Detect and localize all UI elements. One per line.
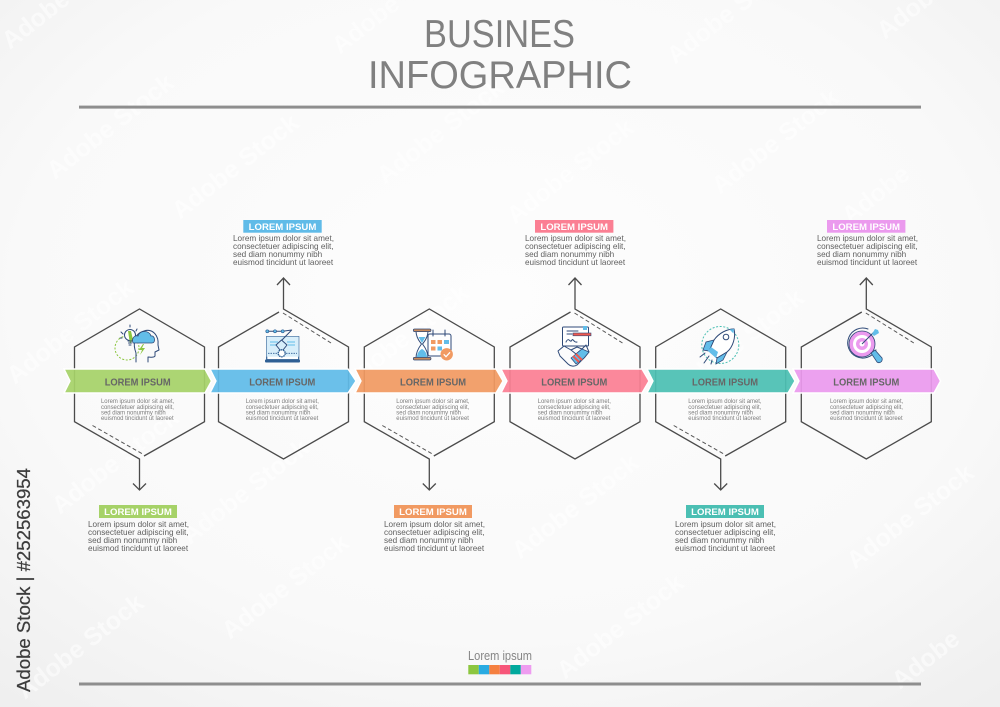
hexagon 1 body text: consectetuer adipiscing elit, xyxy=(101,405,174,411)
hexagon 4 with up arrow xyxy=(510,278,640,459)
hexagon 2 body text: sed diam nonummy nibh xyxy=(246,411,310,417)
hexagon 5 with down arrow xyxy=(656,309,786,490)
callout 5: sed diam nonummy nibh xyxy=(675,536,765,545)
callout 5 xyxy=(675,505,776,553)
hexagon 4 body text: euismod tincidunt ut laoreet xyxy=(538,416,611,422)
title: INFOGRAPHIC xyxy=(368,54,632,97)
hexagon 4 body text: consectetuer adipiscing elit, xyxy=(538,405,611,411)
callout 1: LOREM IPSUM xyxy=(104,507,172,518)
hexagon 2 body text: euismod tincidunt ut laoreet xyxy=(246,416,319,422)
callout 1: Lorem ipsum dolor sit amet, xyxy=(88,520,189,529)
ribbon band 6 xyxy=(793,369,940,393)
callout 4: LOREM IPSUM xyxy=(540,222,608,233)
callout 2: Lorem ipsum dolor sit amet, xyxy=(233,234,334,243)
hexagon 3 body text: euismod tincidunt ut laoreet xyxy=(396,416,469,422)
watermark pattern: Adobe xyxy=(836,160,915,230)
callout 2: LOREM IPSUM xyxy=(249,222,316,233)
hexagon 2 with up arrow xyxy=(218,278,348,459)
callout 1: sed diam nonummy nibh xyxy=(88,536,178,545)
callout 4: euismod tincidunt ut laoreet xyxy=(525,258,626,267)
hexagon 1 body text: sed diam nonummy nibh xyxy=(101,411,166,417)
hexagon 4 body text: sed diam nonummy nibh xyxy=(538,411,602,417)
hexagon 5 body text: Lorem ipsum dolor sit amet, xyxy=(688,399,762,405)
callout 6: LOREM IPSUM xyxy=(832,222,900,233)
hexagon 6 with up arrow xyxy=(801,278,931,459)
icon: laptop with robotic arm xyxy=(265,330,300,362)
hexagon 2 body text: consectetuer adipiscing elit, xyxy=(246,405,319,411)
ribbon band 5: LOREM IPSUM xyxy=(692,378,758,389)
hexagon 3 body text xyxy=(396,399,470,422)
hexagon 6 body text: consectetuer adipiscing elit, xyxy=(830,405,903,411)
watermark pattern: Adobe Stock xyxy=(336,279,474,395)
callout 2: euismod tincidunt ut laoreet xyxy=(233,258,334,267)
stock id vertical text: Adobe Stock | #252563954 xyxy=(14,468,34,692)
hexagon 5 body text: consectetuer adipiscing elit, xyxy=(688,405,762,411)
ribbon band 3 xyxy=(355,369,503,393)
top rule xyxy=(79,106,921,109)
icon: rocket in dashed circle xyxy=(700,326,739,364)
callout 3 xyxy=(384,505,485,553)
callout 1: euismod tincidunt ut laoreet xyxy=(88,544,189,553)
watermark pattern: Adobe Stock xyxy=(841,459,979,575)
hexagon 3 body text: sed diam nonummy nibh xyxy=(396,411,461,417)
hexagon 4 body text xyxy=(538,399,611,422)
callout 6: sed diam nonummy nibh xyxy=(817,250,907,259)
title xyxy=(368,13,632,97)
hexagon 1 body text xyxy=(101,399,175,422)
legend label: Lorem ipsum xyxy=(468,648,532,663)
callout 3: Lorem ipsum dolor sit amet, xyxy=(384,520,485,529)
watermark pattern: Adobe Stock xyxy=(706,84,844,200)
title: BUSINES xyxy=(424,13,575,56)
icon: target with magnifier xyxy=(848,328,882,363)
hexagon 1 with down arrow xyxy=(74,309,204,490)
icon: contract and handshake xyxy=(558,326,591,366)
watermark pattern: Adobe Stock xyxy=(551,569,689,685)
watermark pattern: Adobe xyxy=(886,625,965,695)
watermark pattern: Adobe Stock xyxy=(41,69,179,185)
ribbon band 4 xyxy=(501,369,649,393)
hexagon 6 body text xyxy=(830,399,904,422)
callout 4: consectetuer adipiscing elit, xyxy=(525,242,626,251)
hexagon 1 body text: Lorem ipsum dolor sit amet, xyxy=(101,399,175,405)
legend colour swatches xyxy=(468,665,531,674)
callout 4: Lorem ipsum dolor sit amet, xyxy=(525,234,626,243)
ribbon band 1 xyxy=(64,369,212,393)
hexagon 6 body text: Lorem ipsum dolor sit amet, xyxy=(830,399,904,405)
callout 4 xyxy=(525,220,626,267)
callout 5: euismod tincidunt ut laoreet xyxy=(675,544,776,553)
callout 5: LOREM IPSUM xyxy=(691,507,759,518)
callout 3: euismod tincidunt ut laoreet xyxy=(384,544,485,553)
hexagon 5 body text: euismod tincidunt ut laoreet xyxy=(688,416,761,422)
callout 1 xyxy=(88,505,189,553)
watermark pattern: Adobe Stock xyxy=(176,434,314,550)
watermark pattern: Adobe Stock xyxy=(46,404,184,520)
callout 2: consectetuer adipiscing elit, xyxy=(233,242,334,251)
ribbon band 1: LOREM IPSUM xyxy=(105,378,171,389)
callout 2 xyxy=(233,220,334,267)
ribbon band 3: LOREM IPSUM xyxy=(400,378,466,389)
callout 5: Lorem ipsum dolor sit amet, xyxy=(675,520,776,529)
hexagon 3 body text: Lorem ipsum dolor sit amet, xyxy=(396,399,470,405)
watermark pattern: Adobe Stock xyxy=(371,74,509,190)
callout 6 xyxy=(817,220,918,267)
ribbon band 6: LOREM IPSUM xyxy=(833,378,899,389)
callout 4: sed diam nonummy nibh xyxy=(525,250,615,259)
watermark pattern: Adobe Stock xyxy=(506,449,644,565)
hexagon 1 body text: euismod tincidunt ut laoreet xyxy=(101,416,174,422)
callout 6: consectetuer adipiscing elit, xyxy=(817,242,918,251)
ribbon band 2 xyxy=(210,369,356,393)
watermark pattern: Adobe Stock xyxy=(166,109,304,225)
hexagon 3 with down arrow xyxy=(364,309,494,490)
watermark pattern: Adobe Stock xyxy=(216,529,354,645)
hexagon 4 body text: Lorem ipsum dolor sit amet, xyxy=(538,399,611,405)
callout 6: Lorem ipsum dolor sit amet, xyxy=(817,234,918,243)
watermark pattern: Adobe Stock xyxy=(501,114,639,230)
hexagon 2 body text: Lorem ipsum dolor sit amet, xyxy=(246,399,319,405)
callout 2: sed diam nonummy nibh xyxy=(233,250,323,259)
hexagon 6 body text: sed diam nonummy nibh xyxy=(830,411,895,417)
callout 6: euismod tincidunt ut laoreet xyxy=(817,258,918,267)
callout 1: consectetuer adipiscing elit, xyxy=(88,528,189,537)
callout 3: LOREM IPSUM xyxy=(399,507,467,518)
watermark pattern: Adobe Stock xyxy=(1,274,139,390)
hexagon 5 body text: sed diam nonummy nibh xyxy=(688,411,753,417)
bottom rule xyxy=(79,682,921,686)
hexagon 5 body text xyxy=(688,399,762,422)
callout 3: sed diam nonummy nibh xyxy=(384,536,474,545)
icon: head with bulb and cloud xyxy=(115,325,159,362)
ribbon band 4: LOREM IPSUM xyxy=(541,378,607,389)
ribbon band 2: LOREM IPSUM xyxy=(249,378,315,389)
hexagon 3 body text: consectetuer adipiscing elit, xyxy=(396,405,470,411)
hexagon 6 body text: euismod tincidunt ut laoreet xyxy=(830,416,903,422)
hexagon 2 body text xyxy=(246,399,319,422)
watermark pattern: Adobe Stock xyxy=(671,284,809,400)
watermark pattern: Adobe Stock xyxy=(11,589,149,705)
callout 5: consectetuer adipiscing elit, xyxy=(675,528,776,537)
callout 3: consectetuer adipiscing elit, xyxy=(384,528,485,537)
icon: hourglass and calendar xyxy=(413,329,453,360)
ribbon band 5 xyxy=(647,369,795,393)
